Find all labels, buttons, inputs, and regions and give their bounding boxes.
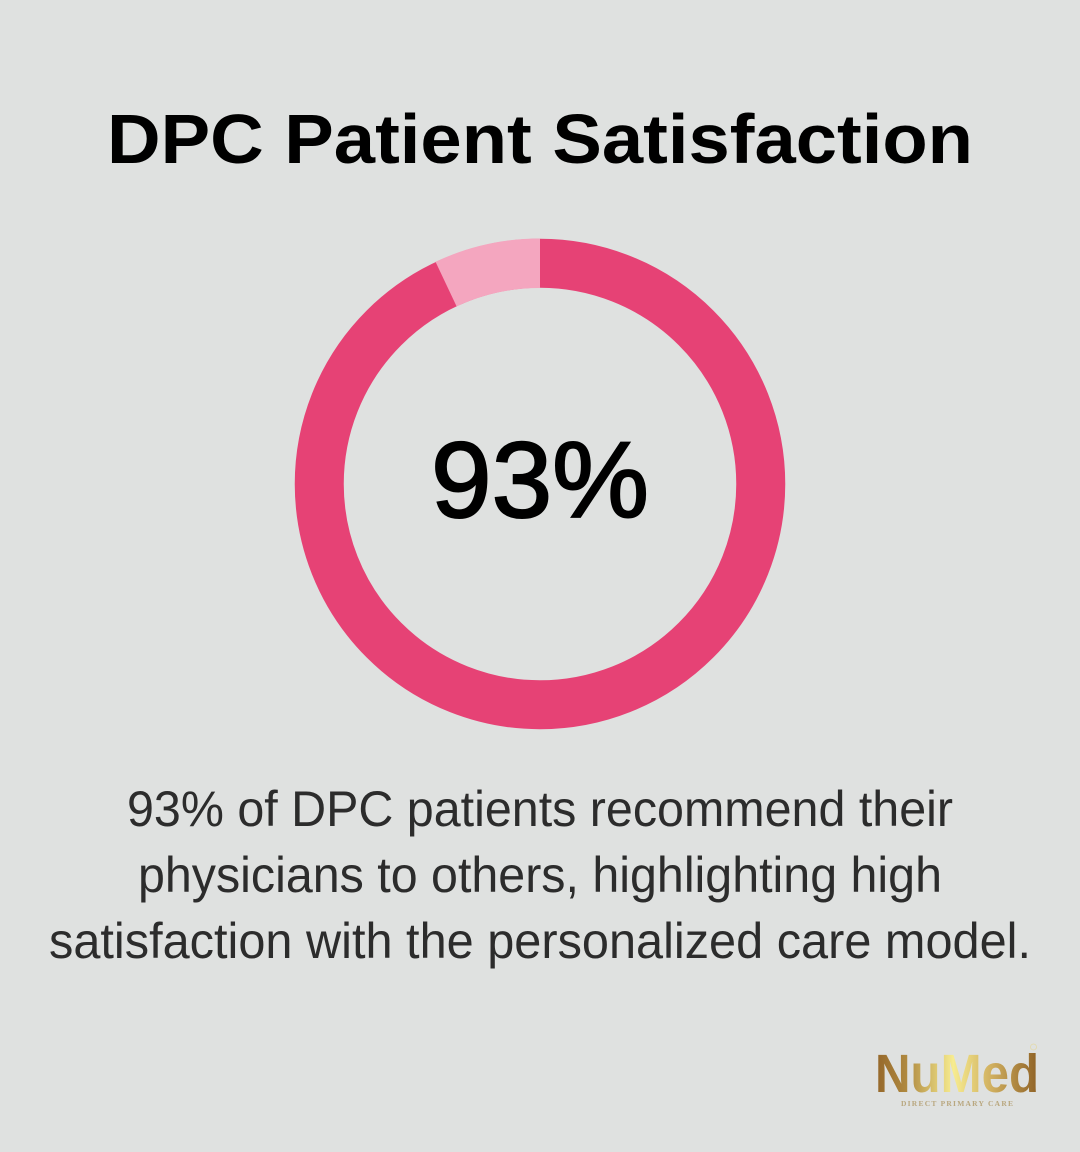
donut remainder segment: 7% [436,238,540,306]
description text [49,781,1031,969]
donut track: full ring [319,263,761,705]
logo: NuMed Direct Primary Care: NuMed [875,1044,1039,1104]
description text: physicians to others, highlighting high [138,847,942,903]
logo: NuMed Direct Primary Care: DIRECT PRIMARY CARE [901,1099,1013,1108]
donut value: 93% [431,419,649,540]
title: DPC Patient Satisfaction [107,100,973,178]
description text: 93% of DPC patients recommend their [127,781,953,837]
description text: satisfaction with the personalized care model. [49,913,1031,969]
donut chart: 93% [319,238,761,705]
